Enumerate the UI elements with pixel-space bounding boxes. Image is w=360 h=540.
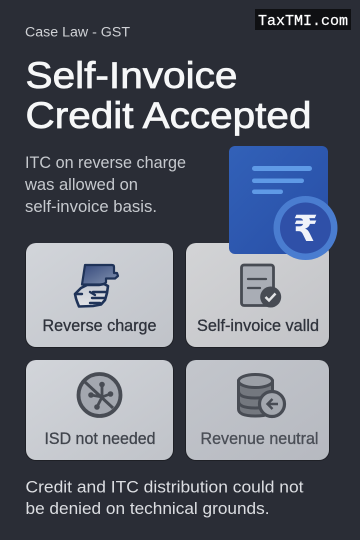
rupee coin: ₹ [293, 208, 318, 249]
intro text [24, 154, 186, 216]
panel: self-invoice valid [185, 243, 330, 348]
icon: hand holding document [75, 265, 118, 306]
eyebrow label: Case Law - GST [25, 24, 130, 40]
panel: reverse charge [25, 243, 174, 348]
panel: revenue neutral [185, 360, 330, 461]
icon: crossed-out network [78, 374, 120, 416]
card label: Self-invoice valld [197, 317, 319, 335]
watermark: TaxTMI.com [258, 13, 348, 30]
closing text: Credit and ITC distribution could not [26, 478, 304, 496]
title [26, 54, 312, 136]
panel: ISD not needed [25, 360, 174, 461]
intro text: self-invoice basis. [25, 198, 157, 216]
card label: Reverse charge [42, 317, 156, 335]
icon: document with check [242, 265, 281, 308]
icon: database with return arrow [238, 374, 284, 416]
closing text: be denied on technical grounds. [26, 499, 270, 518]
closing text [26, 478, 304, 518]
intro text: was allowed on [24, 176, 138, 194]
title: Self-Invoice [26, 54, 238, 96]
card label: Revenue neutral [200, 430, 318, 448]
document [229, 146, 328, 254]
intro text: ITC on reverse charge [25, 154, 186, 172]
icon: blue invoice with rupee coin [229, 146, 338, 260]
document lines [252, 166, 312, 194]
card label: ISD not needed [44, 430, 156, 448]
title: Credit Accepted [26, 94, 312, 136]
